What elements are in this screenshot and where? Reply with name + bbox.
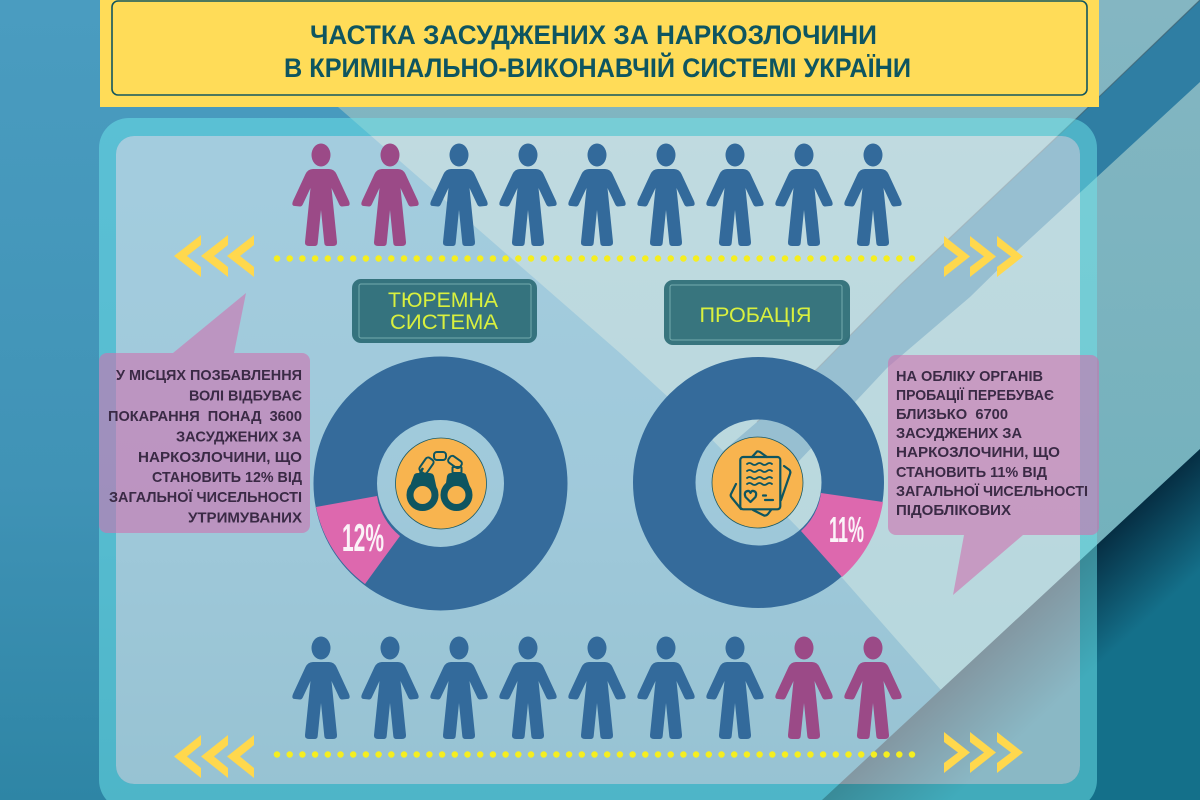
donut chart: prison 12% <box>314 356 568 611</box>
slice: 12% <box>316 496 400 584</box>
slice: 11% <box>801 493 883 577</box>
people row: bottom <box>292 636 902 739</box>
panel: inner <box>116 136 1080 784</box>
callout: prison: У МІСЦЯХ ПОЗБАВЛЕННЯ <box>116 367 302 384</box>
callout: probation: ЗАГАЛЬНОЇ ЧИСЕЛЬНОСТІ <box>896 483 1088 500</box>
arrow: top left chevrons <box>174 235 254 277</box>
title: ЧАСТКА ЗАСУДЖЕНИХ ЗА НАРКОЗЛОЧИНИ <box>310 20 877 50</box>
label: prison system: СИСТЕМА <box>390 311 498 334</box>
icon: handcuffs <box>396 438 486 529</box>
header banner <box>100 0 1099 107</box>
callout: prison: ВОЛІ ВІДБУВАЄ <box>189 388 302 404</box>
callout: probation: ПРОБАЦІЇ ПЕРЕБУВАЄ <box>896 387 1054 404</box>
title <box>284 20 911 83</box>
label: probation <box>664 280 850 345</box>
donut chart: probation 11% <box>633 357 884 608</box>
dotted line: bottom <box>277 751 918 758</box>
callout: prison: ЗАСУДЖЕНИХ ЗА <box>176 428 302 446</box>
label: prison system <box>352 279 537 343</box>
callout: probation: НАРКОЗЛОЧИНИ, ЩО <box>896 444 1060 461</box>
arrow: bottom right chevrons <box>944 732 1023 773</box>
arrow: top right chevrons <box>944 236 1023 277</box>
panel: frame <box>99 118 1097 800</box>
icon: document <box>712 437 803 528</box>
label: prison system: ТЮРЕМНА <box>388 289 498 312</box>
callout: prison: НАРКОЗЛОЧИНИ, ЩО <box>138 449 302 466</box>
callout: prison: УТРИМУВАНИХ <box>188 510 302 526</box>
callout: probation: ЗАСУДЖЕНИХ ЗА <box>896 425 1022 442</box>
callout: probation <box>888 355 1099 595</box>
callout: probation: БЛИЗЬКО 6700 <box>896 406 1008 423</box>
callout: prison: СТАНОВИТЬ 12% ВІД <box>152 469 302 486</box>
callout: prison: ЗАГАЛЬНОЇ ЧИСЕЛЬНОСТІ <box>109 489 302 506</box>
people row: top <box>292 144 902 246</box>
value: 12%: 12% <box>342 517 384 560</box>
callout: prison: ПОКАРАННЯ ПОНАД 3600 <box>108 408 302 425</box>
donut chart: probation 11%: 11% <box>829 509 864 550</box>
title: В КРИМІНАЛЬНО-ВИКОНАВЧІЙ СИСТЕМІ УКРАЇНИ <box>284 52 911 83</box>
dotted line: top <box>277 255 918 262</box>
callout: prison <box>99 293 310 533</box>
callout: probation: ПІДОБЛІКОВИХ <box>896 502 1011 519</box>
callout: probation: НА ОБЛІКУ ОРГАНІВ <box>896 368 1043 385</box>
callout: probation: СТАНОВИТЬ 11% ВІД <box>896 464 1047 481</box>
arrow: bottom left chevrons <box>174 735 254 778</box>
label: probation: ПРОБАЦІЯ <box>700 304 812 327</box>
